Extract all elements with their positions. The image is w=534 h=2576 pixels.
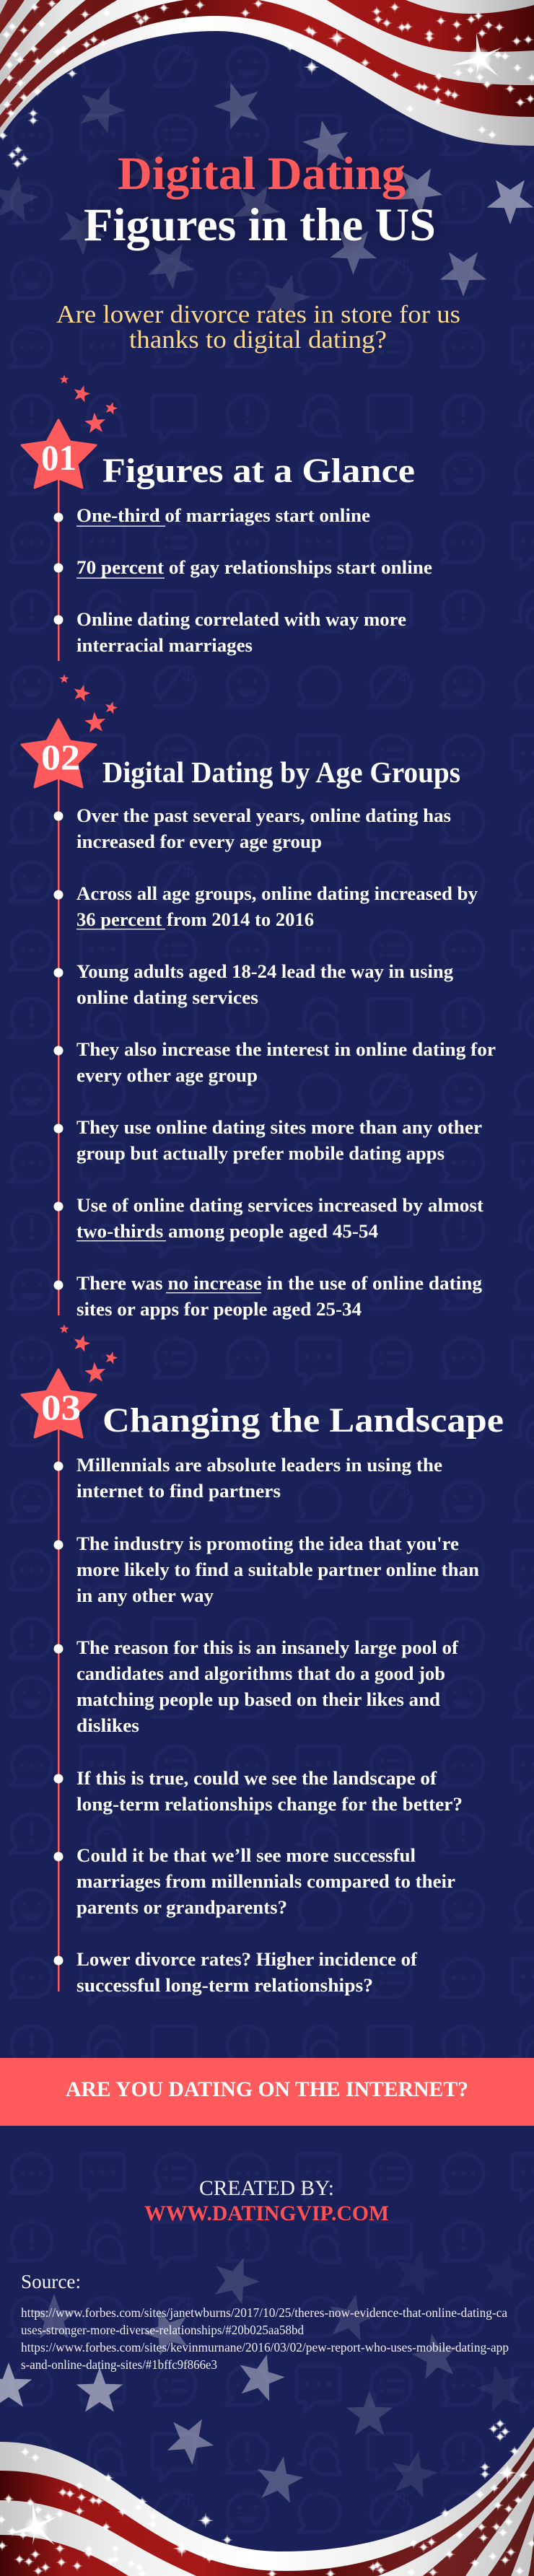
bullet: increase the interest bbox=[53, 1039, 496, 1086]
credits: WWW.DATINGVIP.COM bbox=[144, 2202, 389, 2225]
bullet: increase the interest: They also increase the interest in online dating for bbox=[76, 1039, 496, 1060]
bottom flag sparkles bbox=[0, 2418, 534, 2576]
bullet: lower divorce rates bbox=[53, 1949, 417, 1996]
title bbox=[84, 148, 436, 251]
heading: figures at a glance: Figures at a Glance bbox=[102, 452, 415, 490]
bullet: two-thirds aged 45-54: two-thirds among people aged 45-54 bbox=[76, 1221, 378, 1242]
source list: https://www.forbes.com/sites/janetwburns/2017/10/25/theres-now-evidence-that-online-dating-ca bbox=[21, 2305, 507, 2320]
icon: section 2 star badge: 02 bbox=[41, 737, 80, 777]
credits: CREATED BY: bbox=[199, 2176, 334, 2200]
panel: section 3 changing the landscape bbox=[22, 1324, 504, 1996]
subtitle: thanks to digital dating? bbox=[129, 325, 387, 354]
call to action banner bbox=[0, 2058, 534, 2126]
bullet: 70 percent of gay relationships: 70 percent of gay relationships start online bbox=[76, 557, 432, 578]
bullet: prefer mobile dating apps bbox=[53, 1117, 482, 1164]
bullet: millennials are leaders: internet to find partners bbox=[76, 1481, 281, 1502]
faded stars: top cluster bbox=[0, 76, 533, 323]
bullet: interracial marriages bbox=[53, 609, 406, 656]
bullet: 36 percent increase: Across all age groups, online dating increased by bbox=[76, 883, 478, 904]
bullet: prefer mobile dating apps: They use online dating sites more than any other bbox=[76, 1117, 482, 1138]
bullet: large pool of candidates: The reason for this is an insanely large pool of bbox=[76, 1637, 458, 1658]
icon: section 3 star badge: 03 bbox=[41, 1387, 81, 1427]
bullet: young adults lead: Young adults aged 18-24 lead the way in using bbox=[76, 961, 453, 982]
icon: section 3 star badge bbox=[22, 1324, 119, 1437]
source list: https://www.forbes.com/sites/kevinmurnane/2016/03/02/pew-report-who-uses-mobile-dating-app bbox=[21, 2340, 509, 2354]
bullet: large pool of candidates: candidates and algorithms that do a good job bbox=[76, 1663, 445, 1684]
bullet: 36 percent increase bbox=[53, 883, 478, 930]
subtitle bbox=[56, 300, 460, 354]
credits bbox=[144, 2176, 389, 2225]
bullet: young adults lead bbox=[53, 961, 453, 1008]
bullet: young adults lead: online dating services bbox=[76, 987, 258, 1008]
faded stars: bottom cluster bbox=[0, 2244, 533, 2505]
bullet: prefer mobile dating apps: group but actually prefer mobile dating apps bbox=[76, 1143, 445, 1164]
bullet: lower divorce rates: Lower divorce rates? Higher incidence of bbox=[76, 1949, 417, 1970]
title: Digital Dating bbox=[118, 148, 406, 200]
call to action banner: ARE YOU DATING ON THE INTERNET? bbox=[66, 2077, 468, 2101]
bullet: 36 percent increase: 36 percent from 2014 to 2016 bbox=[76, 909, 314, 930]
source list: uses-stronger-more-diverse-relationships/#20b025aa58bd bbox=[21, 2323, 304, 2337]
subtitle: Are lower divorce rates in store for us bbox=[56, 300, 460, 328]
top flag banner bbox=[0, 0, 534, 146]
bottom flag banner bbox=[0, 2427, 534, 2576]
bullet: increased for every age group: Over the past several years, online dating has bbox=[76, 805, 451, 826]
bullet: industry promoting the idea: The industry is promoting the idea that you're bbox=[76, 1533, 459, 1554]
panel: section 2 digital dating by age groups bbox=[22, 674, 496, 1320]
source list bbox=[21, 2271, 509, 2372]
bullet: industry promoting the idea: more likely to find a suitable partner online than bbox=[76, 1559, 480, 1580]
bullet: large pool of candidates: dislikes bbox=[76, 1715, 139, 1736]
bullet: more successful marriages: parents or grandparents? bbox=[76, 1897, 287, 1918]
bullet: large pool of candidates bbox=[53, 1637, 458, 1736]
source list: s-and-online-dating-sites/#1bffc9f866e3 bbox=[21, 2357, 217, 2372]
bullet: lower divorce rates: successful long-term relationships? bbox=[76, 1975, 373, 1996]
bullet: landscape of long-term relationships: long-term relationships change for the better? bbox=[76, 1794, 463, 1815]
title: Figures in the US bbox=[84, 199, 436, 251]
bullet: interracial marriages: interracial marriages bbox=[76, 635, 253, 656]
bullet: no increase aged 25-34: There was no increase in the use of online dating bbox=[76, 1273, 482, 1294]
source list: Source: bbox=[21, 2271, 81, 2292]
top flag sparkles bbox=[0, 0, 534, 170]
heading: digital dating by age groups: Digital Dating by Age Groups bbox=[102, 755, 460, 789]
bullet: two-thirds aged 45-54: Use of online dating services increased by almost bbox=[76, 1195, 483, 1216]
icon: section 2 star badge bbox=[22, 674, 119, 787]
bullet: no increase aged 25-34: sites or apps for people aged 25-34 bbox=[76, 1299, 362, 1320]
bullet: more successful marriages: Could it be that we’ll see more successful bbox=[76, 1845, 416, 1866]
bullet: increase the interest: every other age group bbox=[76, 1065, 258, 1086]
bullet: more successful marriages: marriages from millennials compared to their bbox=[76, 1871, 455, 1892]
bullet: industry promoting the idea: in any other way bbox=[76, 1585, 214, 1606]
panel: section 1 figures at a glance bbox=[22, 374, 432, 661]
bullet: increased for every age group: increased for every age group bbox=[76, 831, 322, 852]
bullet: landscape of long-term relationships: If this is true, could we see the landscape of bbox=[76, 1768, 437, 1789]
bullet: interracial marriages: Online dating correlated with way more bbox=[76, 609, 406, 630]
bullet: one-third of marriages: One-third of marriages start online bbox=[76, 505, 370, 526]
bullet: two-thirds aged 45-54 bbox=[53, 1195, 483, 1242]
icon: section 1 star badge bbox=[22, 374, 119, 488]
bullet: millennials are leaders bbox=[53, 1455, 442, 1502]
bullet: increased for every age group bbox=[53, 805, 451, 852]
bullet: large pool of candidates: matching people up based on their likes and bbox=[76, 1689, 441, 1710]
bullet: more successful marriages bbox=[53, 1845, 455, 1918]
bullet: industry promoting the idea bbox=[53, 1533, 480, 1606]
heading: changing the landscape: Changing the Landscape bbox=[102, 1401, 504, 1440]
bullet: no increase aged 25-34 bbox=[53, 1273, 482, 1320]
bullet: millennials are leaders: Millennials are absolute leaders in using the bbox=[76, 1455, 442, 1476]
bullet: landscape of long-term relationships bbox=[53, 1768, 463, 1815]
icon: section 1 star badge: 01 bbox=[41, 437, 76, 478]
